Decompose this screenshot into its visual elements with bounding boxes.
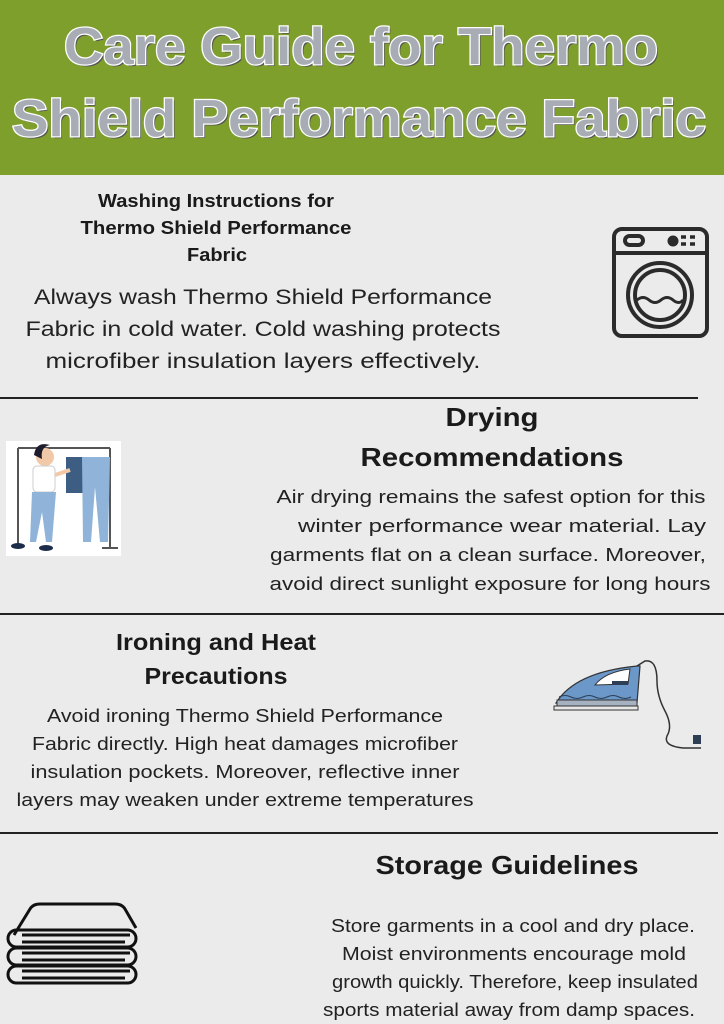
title: Shield Performance Fabric — [14, 92, 708, 150]
storage heading: Storage Guidelines — [376, 850, 638, 880]
drying body: Air drying remains the safest option for this — [276, 487, 706, 507]
header banner — [0, 0, 724, 175]
divider — [0, 832, 718, 834]
section: washing — [26, 191, 500, 373]
ironing body: Avoid ironing Thermo Shield Performance — [47, 706, 443, 726]
washing body — [26, 286, 500, 373]
washing heading: Fabric — [187, 245, 247, 265]
drying heading — [360, 402, 624, 472]
washing heading: Washing Instructions for — [98, 191, 334, 211]
title — [12, 18, 708, 150]
title: Care Guide for Thermo — [66, 20, 660, 78]
storage body — [323, 916, 698, 1020]
section: ironing — [16, 629, 473, 810]
washing body: Always wash Thermo Shield Performance — [34, 286, 492, 309]
ironing heading: Ironing and Heat — [116, 629, 316, 655]
icon: washing machine — [614, 229, 707, 336]
icon: woman with clothes rack — [6, 441, 121, 556]
washing body: Fabric in cold water. Cold washing protects — [26, 318, 500, 341]
drying body: avoid direct sunlight exposure for long hours — [270, 574, 710, 594]
storage body: Store garments in a cool and dry place. — [331, 916, 695, 936]
section: drying — [270, 402, 710, 594]
storage body: growth quickly. Therefore, keep insulated — [332, 972, 698, 992]
drying body: winter performance wear material. Lay — [297, 516, 706, 536]
icon: iron — [554, 661, 701, 748]
section: storage — [323, 850, 698, 1020]
title: Shield Performance Fabric — [12, 90, 706, 148]
ironing body — [16, 706, 473, 810]
ironing body: insulation pockets. Moreover, reflective inner — [30, 762, 460, 782]
storage body: Moist environments encourage mold — [342, 944, 686, 964]
storage body: sports material away from damp spaces. — [323, 1000, 695, 1020]
divider — [0, 397, 698, 399]
title: Care Guide for Thermo — [64, 18, 658, 76]
drying heading: Recommendations — [360, 442, 624, 472]
drying heading: Drying — [446, 402, 538, 432]
drying body: garments flat on a clean surface. Moreover, — [270, 545, 706, 565]
drying body — [270, 487, 710, 594]
divider — [0, 613, 724, 615]
ironing body: layers may weaken under extreme temperatures — [16, 790, 473, 810]
ironing heading — [116, 629, 316, 689]
ironing body: Fabric directly. High heat damages microfiber — [32, 734, 458, 754]
icon: folded towels — [8, 904, 136, 983]
washing body: microfiber insulation layers effectively. — [46, 350, 480, 373]
washing heading — [80, 191, 352, 265]
ironing heading: Precautions — [144, 663, 288, 689]
washing heading: Thermo Shield Performance — [80, 218, 352, 238]
